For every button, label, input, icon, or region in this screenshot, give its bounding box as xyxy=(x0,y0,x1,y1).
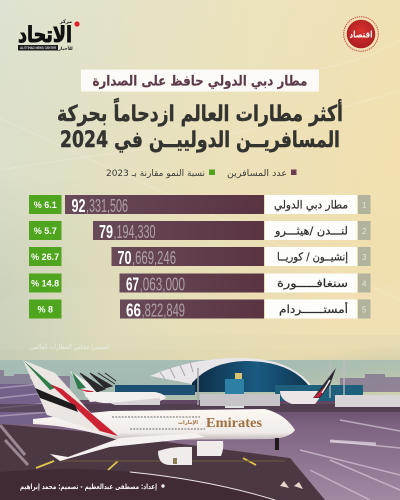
row 5: Amsterdam xyxy=(29,300,370,320)
main aircraft xyxy=(23,360,295,465)
airline name: Emirates xyxy=(206,416,263,431)
logo: Al Ittihad news center xyxy=(18,19,80,52)
logo wordmark: الاتحاد xyxy=(18,23,72,48)
row 5: Amsterdam: 5 xyxy=(362,306,367,314)
sky haze xyxy=(0,335,400,405)
tail stripes xyxy=(23,360,118,436)
fuselage xyxy=(33,409,295,440)
row 4: Singapore xyxy=(29,274,370,294)
logo caption bar: ALITTIHAD NEWS CENTER xyxy=(20,46,56,50)
ground and tarmac xyxy=(0,384,400,500)
row 2: London Heathrow: 79 xyxy=(99,221,113,242)
row 3: Incheon Korea: إنشيــون / كوريــا xyxy=(277,250,348,264)
subtitle box: مطار دبي الدولي حافظ على الصدارة xyxy=(92,74,308,90)
ranking chart xyxy=(29,195,370,320)
row 4: Singapore: 67 xyxy=(126,274,139,294)
airport photo scene xyxy=(0,335,400,500)
row 1: Dubai: 1 xyxy=(362,201,367,210)
row 4: Singapore: 4 xyxy=(362,280,367,288)
legend: growth: نسبة النمو مقارنة بـ 2023 xyxy=(106,169,205,179)
row 3: Incheon Korea: 3 xyxy=(362,253,367,262)
logo small word: مركز xyxy=(59,19,72,25)
row 2: London Heathrow: لنـــدن /هيثـــرو xyxy=(274,224,348,238)
row 2: London Heathrow: 2 xyxy=(362,227,367,236)
row 1: Dubai xyxy=(29,195,370,216)
row 3: Incheon Korea: 70 xyxy=(118,247,132,268)
wing xyxy=(50,433,205,461)
row 3: Incheon Korea: % 26.7 xyxy=(31,252,59,262)
badge: economy xyxy=(344,17,378,51)
distant skyline xyxy=(0,370,400,392)
title xyxy=(57,97,343,153)
row 5: Amsterdam: أمستــــــردام xyxy=(279,302,348,316)
row 1: Dubai: ,331,506 xyxy=(86,195,128,216)
row 4: Singapore: ,063,000 xyxy=(140,274,185,294)
landing gear xyxy=(275,438,279,450)
tail fin xyxy=(23,360,120,436)
terminal dome xyxy=(115,358,363,408)
credit bullet xyxy=(161,484,165,488)
ground vehicles xyxy=(280,481,303,489)
badge: economy: اقتصاد xyxy=(350,30,372,40)
arabic airline name: الإمارات xyxy=(178,420,198,426)
row 4: Singapore: سنغافـــــورة xyxy=(277,277,348,290)
row 3: Incheon Korea xyxy=(29,247,370,268)
row 1: Dubai: % 6.1 xyxy=(34,200,57,210)
row 2: London Heathrow: ,194,330 xyxy=(114,221,156,242)
footer xyxy=(0,469,275,500)
row 5: Amsterdam: ,822,849 xyxy=(142,300,185,320)
logo red dot xyxy=(74,21,80,27)
source note: المصدر/ مجلس المطارات العالمي xyxy=(30,343,110,351)
windows xyxy=(112,417,205,429)
row 1: Dubai: مطار دبي الدولي xyxy=(274,198,348,212)
engines xyxy=(158,441,223,465)
row 5: Amsterdam: % 8 xyxy=(37,304,53,314)
logo caption bar xyxy=(18,45,73,52)
row 1: Dubai: 92 xyxy=(72,195,86,216)
title: المسافريــن الدولييــن في 2024 xyxy=(60,128,340,153)
legend: passengers: عدد المسافرين xyxy=(227,169,287,179)
row 2: London Heathrow: % 5.7 xyxy=(34,226,57,236)
rear aircraft left xyxy=(70,371,166,405)
row 5: Amsterdam: 66 xyxy=(126,300,141,320)
row 3: Incheon Korea: ,669,246 xyxy=(132,247,176,268)
row 4: Singapore: % 14.8 xyxy=(31,278,59,288)
legend xyxy=(106,169,296,179)
logo caption bar: للأخبار xyxy=(57,45,73,52)
row 2: London Heathrow xyxy=(29,221,370,242)
rear aircraft right xyxy=(280,368,400,407)
subtitle box xyxy=(81,70,319,92)
credits: إعداد: مصطفى عبدالعظيم - تصميم: محمد إبراهيم xyxy=(20,482,157,491)
